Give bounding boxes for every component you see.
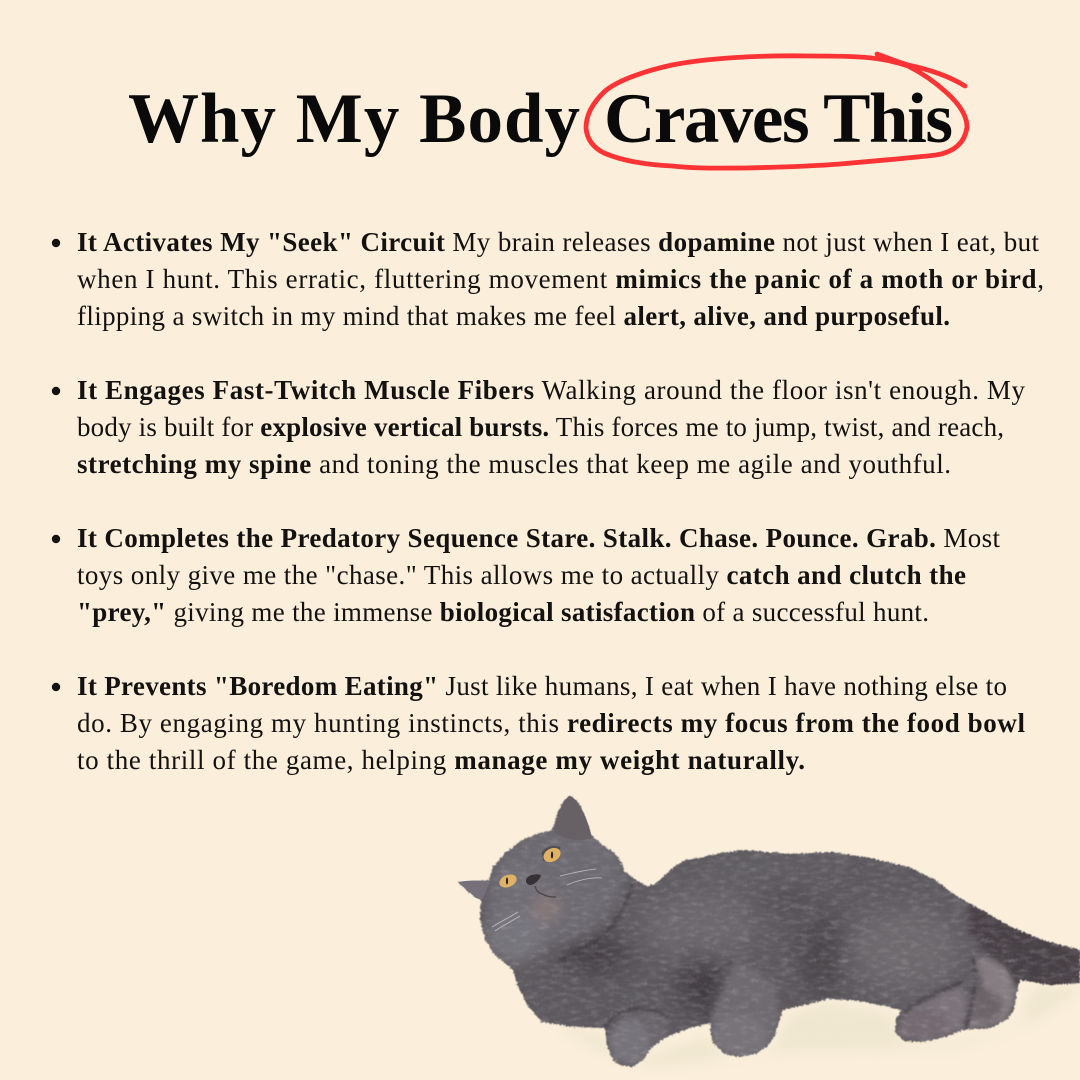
- bullet 3: It Completes the Predatory Sequence: [52, 523, 1000, 627]
- illustration: grey cat lying on its side looking up: [450, 790, 1080, 1075]
- tail: [968, 905, 1080, 990]
- bullet 2: It Engages Fast-Twitch Muscle Fibers: [52, 375, 1026, 479]
- bullet 1: It Activates My "Seek" Circuit: It Activates My "Seek" Circuit My brain releases dopamine not just when I eat, but: [77, 227, 1039, 257]
- head: [483, 826, 625, 966]
- title: Craves This: [604, 80, 953, 158]
- bullet list: [52, 227, 1044, 775]
- red hand-drawn circle around "Craves This": [586, 54, 967, 168]
- bullet 3: It Completes the Predatory Sequence: "prey," giving me the immense biological satisfaction of a successful hunt.: [77, 597, 929, 627]
- bullet 3: It Completes the Predatory Sequence: It Completes the Predatory Sequence Stare. Stalk. Chase. Pounce. Grab. Most: [77, 523, 1000, 553]
- fur texture: [482, 852, 1080, 1032]
- base fur: [450, 790, 1080, 1075]
- bullet 2: It Engages Fast-Twitch Muscle Fibers: body is built for explosive vertical bursts. This forces me to jump, twist, and reach,: [77, 412, 1004, 442]
- bullet 2: It Engages Fast-Twitch Muscle Fibers: stretching my spine and toning the muscles that keep me agile and youthful.: [77, 449, 951, 479]
- bullet 3: It Completes the Predatory Sequence: toys only give me the "chase." This allows me to actually catch and clutch the: [77, 560, 966, 590]
- bullet 1: It Activates My "Seek" Circuit: [52, 227, 1044, 331]
- bullet 4: It Prevents "Boredom Eating": It Prevents "Boredom Eating" Just like humans, I eat when I have nothing else to: [77, 671, 1007, 701]
- eyes: [497, 845, 563, 890]
- cat body: [450, 790, 1080, 1075]
- fold lines: [560, 885, 975, 1030]
- bullet 1: It Activates My "Seek" Circuit: when I hunt. This erratic, fluttering movement mimics the panic of a moth or bird,: [77, 264, 1044, 294]
- bullet 2: It Engages Fast-Twitch Muscle Fibers: It Engages Fast-Twitch Muscle Fibers Walking around the floor isn't enough. My: [77, 375, 1026, 405]
- bullet 4: It Prevents "Boredom Eating": to the thrill of the game, helping manage my weight naturally.: [77, 745, 805, 775]
- bullet 1: It Activates My "Seek" Circuit: flipping a switch in my mind that makes me feel alert, alive, and purposeful.: [77, 301, 950, 331]
- front legs: [607, 962, 779, 1068]
- shaded body: [557, 888, 962, 1021]
- hind paws: [895, 958, 1015, 1042]
- title: [128, 80, 953, 158]
- whiskers: [492, 869, 602, 931]
- nose and mouth: [526, 874, 556, 897]
- floor shadow: [550, 985, 1080, 1068]
- bullet 4: It Prevents "Boredom Eating": do. By engaging my hunting instincts, this redirects my focus from the food bowl: [77, 708, 1025, 738]
- title: Why My Body: [128, 80, 580, 158]
- bullet 4: It Prevents "Boredom Eating": [52, 671, 1025, 775]
- ears: [458, 796, 592, 900]
